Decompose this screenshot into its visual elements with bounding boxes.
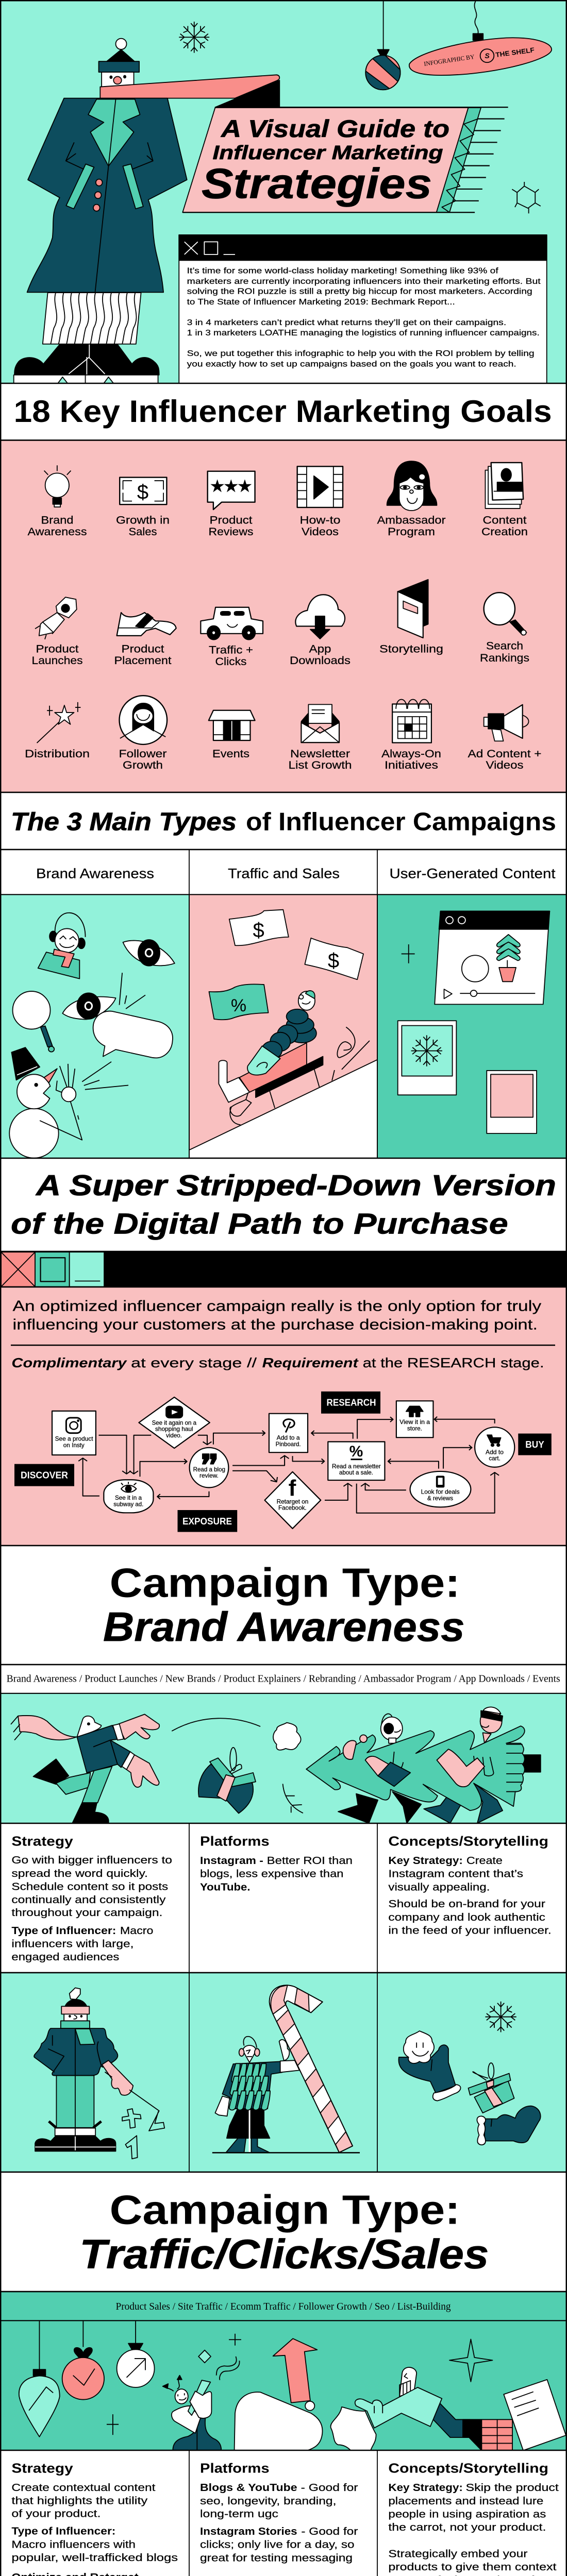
step: pinboard: Pinboard. [276,1440,301,1448]
table: campaign type labels: Traffic and Sales [228,866,340,881]
step: add to cart: Add to [486,1448,504,1455]
intro text: It’s time for some world-class holiday marketing! Something like 93% of [187,267,498,276]
column: concepts: placements and instead lure [388,2496,543,2507]
stage: discover [14,1464,74,1486]
heading: campaign type traffic: Traffic/Clicks/Sales [79,2231,489,2277]
goal: brand awareness: Awareness [28,526,87,538]
table: campaign type labels: Brand Awareness [36,866,154,881]
column: concepts: Skip the product [466,2482,559,2494]
column: strategy: Create contextual content [11,2482,156,2494]
step: retarget on facebook: Facebook. [278,1504,307,1512]
column: strategy: Type of Influencer: [11,2526,115,2537]
column: concepts: Key Strategy: [388,1855,463,1867]
stage: research [321,1392,380,1414]
goal: product reviews: Reviews [208,526,254,538]
goal: follower growth: Growth [123,759,163,771]
step: instagram: See a product [55,1435,93,1443]
column: concepts: people in using aspiration as [388,2509,546,2520]
column: platforms: seo, longevity, branding, [200,2496,336,2507]
goal: follower growth: Follower [119,748,167,760]
complimentary and requirement line: Requirement [262,1355,359,1370]
column: strategy [11,1833,172,1963]
column: strategy: Macro [120,1925,153,1937]
heading: 3 main types [0,792,567,850]
step: deals and reviews: Look for deals [421,1488,460,1496]
goal: product launches: Launches [32,655,82,667]
intro text: marketers are currently incorporating influencers into their marketing efforts. But [187,277,541,286]
step: blog review [190,1448,228,1487]
column: platforms: Blogs & YouTube [200,2482,297,2494]
intro text: solving the ROI puzzle is still a pretty big hiccup for most marketers. According [187,287,532,296]
goal: product placement: Placement [114,655,172,667]
intro statement [12,1298,542,1333]
column: strategy: of your product. [11,2509,101,2520]
column: strategy: continually and consistently [11,1894,165,1906]
column: platforms: blogs, less expensive than [200,1869,343,1880]
column: concepts [388,2461,559,2576]
subline: brand awareness goals [0,1665,567,1693]
goal: ambassador program: Ambassador [377,514,446,526]
column: platforms [200,2461,358,2564]
step: pinboard: Add to a [277,1434,300,1442]
goal: app downloads: Downloads [290,655,351,667]
step: shopping haul video [139,1397,210,1448]
intro statement: influencing your customers at the purchase decision-making point. [12,1316,538,1333]
goal: traffic and clicks: Traffic + [209,645,253,656]
big rock with arrow [235,2338,323,2450]
goal: content creation: Creation [481,526,528,538]
column: platforms: Platforms [200,2461,270,2476]
column: concepts: Concepts/Storytelling [388,1833,548,1849]
column: platforms: clicks; only live for a day, so [200,2539,355,2551]
step: shopping haul video: See it again on a [152,1419,196,1426]
running man [11,1714,159,1823]
panel: hero [0,0,567,383]
title line 2: Influencer Marketing [212,142,443,164]
snowball and arc [172,1718,301,1750]
column: concepts: company and look authentic [388,1912,545,1923]
goal: brand awareness: Brand [41,514,73,526]
goal: growth in sales: Growth in [116,514,170,526]
intro text: 1 in 3 marketers LOATHE managing the logistics of running influencer campaigns. [187,329,540,337]
column: platforms: - Good for [301,2482,358,2494]
column: concepts [388,1833,552,1936]
goal: product reviews [208,471,255,538]
heading: 18 key goals [0,383,567,440]
column: strategy: engaged audiences [11,1952,119,1963]
step: shopping haul video: video. [166,1432,182,1439]
goal: newsletter list growth [289,704,352,771]
goal: newsletter list growth: Newsletter [290,748,350,760]
heading: 18 key goals: 18 Key Influencer Marketing Goals [14,394,552,429]
column: strategy: that highlights the utility [11,2495,147,2506]
hanging ornaments [19,2321,241,2437]
stage: exposure [177,1510,237,1532]
column: platforms: Platforms [200,1833,270,1849]
stage: buy [518,1433,552,1455]
heading: digital path to purchase: A Super Stripped-Down Version [35,1169,556,1202]
step: deals and reviews: & reviews [427,1495,453,1502]
heading: digital path to purchase [0,1158,567,1251]
heading: campaign type traffic: Campaign Type: [110,2187,460,2233]
step: retarget on facebook [265,1472,321,1529]
icon: wire snowflake [512,182,541,213]
table: campaign type labels: User-Generated Content [390,866,556,881]
subline: brand awareness goals: Brand Awareness / Product Launches / New Brands / Product Explainers / Rebranding / Ambassador Program / App Downloads / Events [7,1673,560,1685]
panel: user-generated content illustration [377,894,567,1158]
subline: traffic goals: Product Sales / Site Traffic / Ecomm Traffic / Follower Growth / Seo / List-Building [115,2301,451,2312]
heading: 3 main types: The 3 Main Types [11,808,237,836]
icon: brand ornament: INFOGRAPHIC BY [423,53,475,67]
goal: always-on initiatives [381,700,441,771]
intro statement: An optimized influencer campaign really is the only option for truly [12,1298,542,1315]
panel: path to purchase [0,1287,567,1546]
column: platforms: Instagram Stories [200,2526,297,2537]
goal: storytelling [379,580,443,655]
panel: traffic and sales illustration: $ [328,950,339,972]
goal: app downloads: App [309,643,331,655]
icon: snowflake [179,22,209,53]
goal: newsletter list growth: List Growth [289,759,352,771]
step: newsletter [328,1442,385,1480]
panel: goals grid [0,440,567,792]
goal: traffic and clicks: Clicks [215,656,246,668]
column: strategy [11,2461,178,2576]
stage: discover: DISCOVER [21,1470,68,1480]
panel: brand awareness scene [0,1693,567,1823]
goal: content creation: Content [482,514,527,526]
intro text [187,267,541,368]
step: subway ad: See it in a [115,1494,142,1501]
twig [283,1784,303,1813]
column: concepts: Concepts/Storytelling [388,2461,548,2476]
step: store [396,1401,433,1437]
flying gift [198,1748,256,1814]
column: concepts: Key Strategy: [388,2482,463,2494]
complimentary and requirement line: at the RESEARCH stage. [363,1355,544,1370]
intro text: you exactly how to set up campaigns based on the goals you want to reach. [187,360,516,368]
figure: mittens and gift [398,2002,541,2145]
goal: growth in sales [116,478,170,538]
table: traffic details [0,2450,567,2576]
step: newsletter: Read a newsletter [332,1463,381,1470]
step: store: store. [407,1425,422,1432]
column: strategy: Strategy [11,2461,73,2476]
column: concepts: Should be on-brand for your [388,1899,545,1910]
column: concepts: visually appealing. [388,1882,490,1893]
column: strategy: Schedule content so it posts [11,1882,168,1893]
panel: brand awareness illustration [0,894,189,1158]
goal: ad content and videos: Ad Content + [468,748,541,760]
heading: digital path to purchase: of the Digital Path to Purchase [11,1208,508,1241]
two people carrying tree [306,1707,541,1823]
step: instagram: on Insty [63,1442,85,1449]
goal: ambassador program [377,461,446,538]
heading: 3 main types: of Influencer Campaigns [246,808,556,836]
step: deals and reviews [410,1471,471,1507]
goal: how-to videos: Videos [302,526,339,538]
goal: growth in sales: Sales [129,526,157,538]
goal: ad content and videos: Videos [486,759,524,771]
title line 1: A Visual Guide to [221,115,449,142]
goal: app downloads [290,595,351,667]
title line 3: Strategies [202,160,432,207]
step: newsletter: % [349,1443,363,1460]
intro text: 3 in 4 marketers can’t predict what returns they’ll get on their campaigns. [187,318,506,327]
step: blog review: review. [199,1472,219,1479]
goal: ambassador program: Program [388,526,435,538]
column: concepts: Instagram content that’s [388,1869,523,1880]
panel: traffic and sales illustration [189,894,377,1158]
complimentary and requirement line: at every stage // [131,1355,257,1370]
stage: buy: BUY [525,1439,544,1450]
goal: product placement: Product [122,643,164,655]
column: strategy: influencers with large, [11,1939,134,1950]
column: platforms: great for testing messaging [200,2552,353,2564]
step: retarget on facebook: Retarget on [277,1498,308,1505]
heading: campaign type brand awareness: Brand Awareness [103,1604,465,1650]
goal: brand awareness [28,465,87,538]
window bar [0,1251,567,1287]
divider lines of panel row [189,894,377,1158]
intro text: So, we put together this infographic to help you with the ROI problem by telling [187,349,535,358]
goal: how-to videos: How-to [300,514,340,526]
goal: product launches: Product [36,643,79,655]
table: campaign type labels [0,850,567,894]
goal: events: Events [212,748,249,760]
stage: research: RESEARCH [327,1398,376,1408]
goal: storytelling: Storytelling [379,643,443,655]
step: shopping haul video: shopping haul [155,1425,193,1432]
arrows [78,1417,499,1513]
figure: candy cane [212,1985,360,2153]
table: brand awareness details [0,1823,567,1973]
subline: traffic goals [0,2292,567,2320]
icon: brand ornament: THE SHELF [495,46,535,59]
column: strategy: Strategy [11,1833,73,1849]
stage: exposure: EXPOSURE [182,1516,232,1527]
goal: growth in sales: $ [137,481,148,504]
step: newsletter: about a sale. [339,1469,373,1476]
column: platforms: Instagram - [200,1855,263,1867]
goal: ad content and videos [468,705,541,771]
goal: traffic and clicks [201,607,263,668]
goal: search rankings [480,592,529,664]
column: concepts: products to give them context [388,2562,557,2573]
step: store: View it in a [399,1418,430,1426]
column: platforms: long-term ugc [200,2509,278,2520]
panel: traffic scene [0,2320,567,2450]
complimentary and requirement line [11,1355,544,1370]
goal: product placement [114,613,176,667]
person with phone [163,2376,221,2450]
step: subway ad: subway ad. [113,1500,143,1507]
goal: how-to videos [297,466,343,538]
flow diagram [14,1392,552,1532]
panel: traffic and sales illustration: % [231,996,246,1015]
column: platforms: Better ROI than [267,1855,353,1867]
goal: always-on initiatives: Always-On [381,748,441,760]
icon: brand ornament: S [485,52,490,60]
heading: campaign type traffic [0,2172,567,2292]
goal: product launches [32,597,82,667]
goal: content creation [481,463,528,538]
four point star [449,2339,492,2382]
column: platforms: YouTube. [200,1882,251,1893]
goal: search rankings: Rankings [480,652,529,664]
column: strategy: popular, well-trafficked blogs [11,2552,178,2564]
goal: events [209,710,255,760]
column: concepts: Create [466,1855,503,1867]
goal: search rankings: Search [486,640,523,652]
icon: striped ornament [365,1,401,91]
complimentary and requirement line: Complimentary [11,1355,127,1370]
panel: intro window [179,235,547,383]
column: platforms: - Good for [301,2526,358,2537]
step: add to cart: cart. [489,1455,501,1462]
step: blog review: Read a blog [193,1466,225,1473]
column: strategy: Go with bigger influencers to [11,1855,172,1866]
column: concepts: Strategically embed your [388,2548,528,2560]
goal: follower growth [119,696,167,771]
step: subway ad [104,1480,153,1513]
step: add to cart [475,1427,514,1467]
goal: product reviews: Product [209,514,253,526]
icon: brand ornament [409,1,552,75]
panel: traffic and sales illustration: $ [253,919,264,942]
column: strategy: Type of Influencer: [11,1925,116,1937]
column: concepts: in the feed of your influencer. [388,1925,552,1936]
intro text: to The State of Influencer Marketing 2019: Bechmark Report... [187,298,455,307]
column: concepts: the carrot, not your product. [388,2522,546,2533]
goal: distribution [25,702,90,760]
column: strategy: Macro influencers with [11,2539,136,2550]
panel: brand awareness figures [0,1973,567,2172]
heading: campaign type brand awareness: Campaign Type: [110,1560,460,1606]
column: strategy: throughout your campaign. [11,1907,162,1919]
figure: man with stick [34,1988,164,2159]
heading: campaign type brand awareness [0,1546,567,1665]
column: strategy: spread the word quickly. [11,1868,148,1879]
person pushing paper [331,2367,566,2450]
goal: always-on initiatives: Initiatives [385,759,438,771]
column: platforms [200,1833,353,1893]
step: instagram [52,1411,96,1455]
goal: distribution: Distribution [25,748,90,760]
panel: title banner [182,107,508,212]
illustration: man in coat with long nose [14,39,279,383]
step: pinboard [269,1414,308,1452]
step: retarget on facebook: f [289,1476,296,1501]
